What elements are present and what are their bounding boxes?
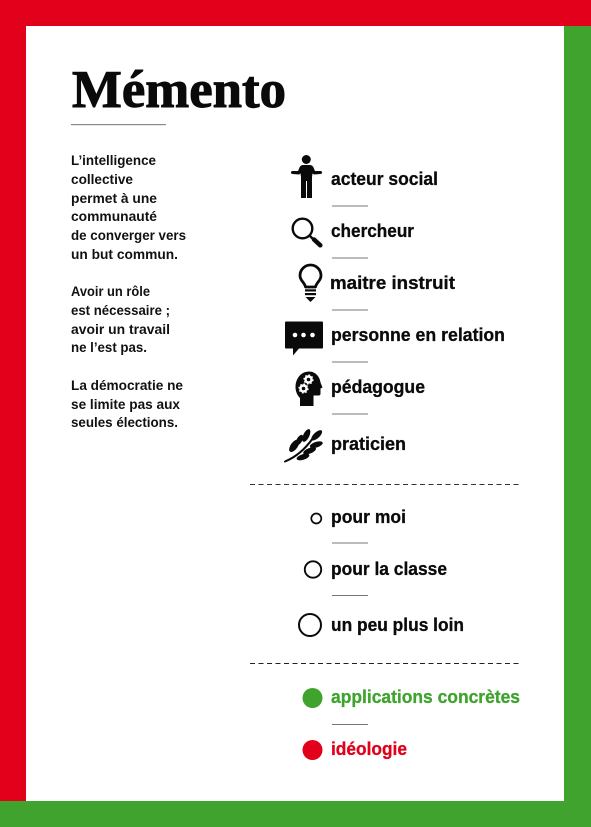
label: pour la classe: pour la classe	[331, 558, 447, 579]
text block: intelligence collective: permet à une	[71, 191, 157, 206]
label: idéologie: idéologie	[331, 738, 407, 759]
text block: intelligence collective: L’intelligence	[71, 153, 156, 168]
label: maitre instruit: maitre instruit	[330, 272, 455, 293]
text block: rôle et travail: avoir un travail	[71, 322, 170, 337]
icon: person	[291, 155, 322, 198]
icon: light bulb	[300, 265, 321, 302]
text block: rôle et travail: ne l’est pas.	[71, 340, 147, 355]
title: Mémento	[72, 61, 286, 119]
text block: intelligence collective: collective	[71, 172, 133, 187]
text block: intelligence collective	[71, 153, 186, 262]
label: un peu plus loin: un peu plus loin	[331, 614, 464, 635]
text block: démocratie: La démocratie ne	[71, 378, 183, 393]
label: acteur social: acteur social	[331, 168, 438, 189]
text block: rôle et travail: est nécessaire ;	[71, 303, 170, 318]
icon: branch with leaves	[285, 428, 324, 462]
label: pédagogue: pédagogue	[331, 376, 425, 397]
text block: rôle et travail: Avoir un rôle	[71, 284, 150, 299]
label: personne en relation: personne en relation	[331, 324, 505, 345]
label: pour moi: pour moi	[331, 506, 406, 527]
icon: green dot	[302, 688, 322, 708]
icon: red dot	[302, 740, 322, 760]
icon: small circle	[311, 514, 321, 524]
text block: intelligence collective: un but commun.	[71, 247, 178, 262]
icon: magnifying glass	[293, 219, 320, 245]
text block: intelligence collective: communauté	[71, 209, 158, 224]
icon: head with gears	[296, 372, 322, 406]
label: applications concrètes: applications concrètes	[331, 686, 520, 707]
text block: rôle et travail	[71, 284, 170, 355]
label: praticien: praticien	[331, 433, 406, 454]
label: chercheur: chercheur	[331, 220, 414, 241]
icon: speech bubble	[285, 322, 323, 356]
text block: intelligence collective: de converger vers	[71, 228, 186, 243]
text block: démocratie: seules élections.	[71, 415, 178, 430]
icon: medium circle	[305, 561, 321, 578]
text block: démocratie	[71, 378, 183, 430]
icon: large circle	[299, 614, 321, 636]
text block: démocratie: se limite pas aux	[71, 397, 180, 412]
